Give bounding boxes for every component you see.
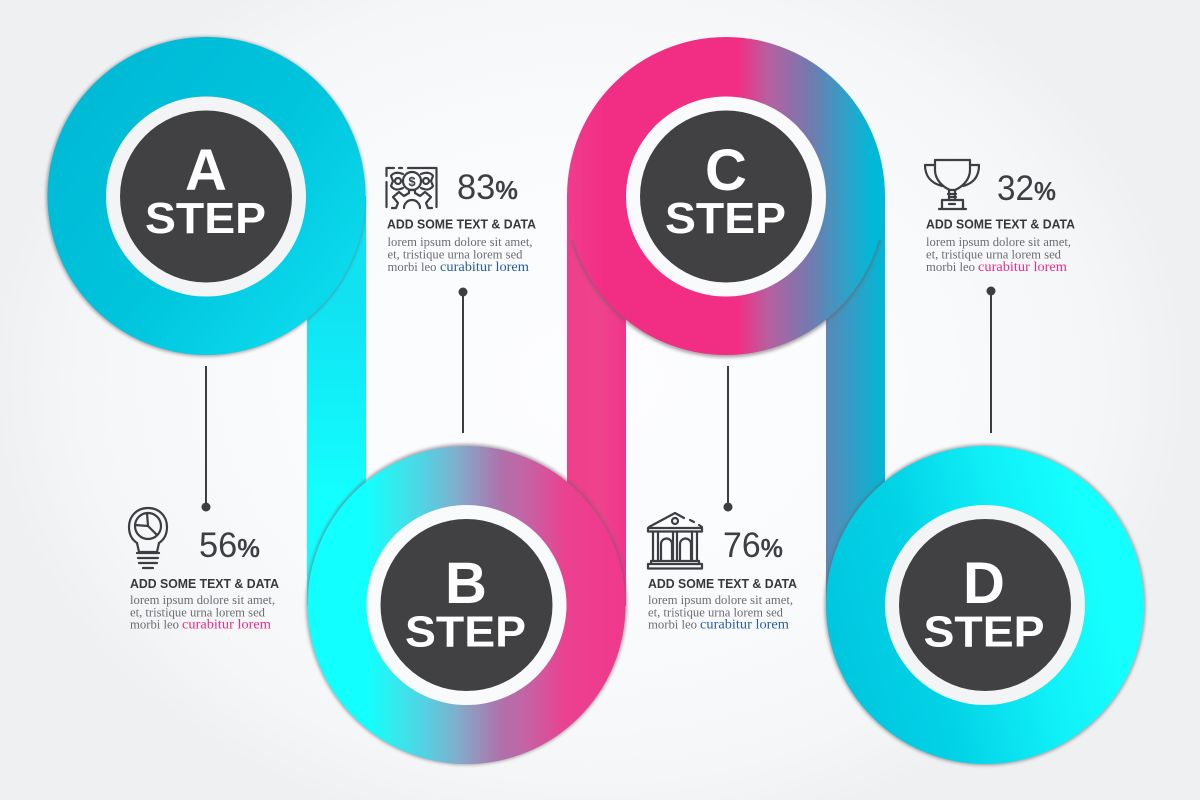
step D circle: STEP: [924, 608, 1044, 656]
leader line: C: [724, 366, 732, 512]
connector band: B to C: [567, 196, 626, 606]
body text: curabitur lorem: [700, 616, 789, 632]
step B circle: B: [445, 551, 487, 616]
info block: A 56%: [129, 508, 279, 632]
heading: ADD SOME TEXT & DATA: [926, 218, 1075, 232]
percentage: 32%: [997, 169, 1056, 208]
connector band: A to B: [307, 196, 366, 606]
step A circle: STEP: [145, 194, 266, 243]
info block: D 32%: [925, 160, 1075, 274]
icon: money and gear: $: [408, 174, 416, 189]
body text: morbi leo: [648, 618, 697, 632]
info block: C 76%: [648, 513, 797, 632]
step D circle: D: [963, 551, 1005, 616]
body text: curabitur lorem: [440, 259, 529, 274]
body text: lorem ipsum dolore sit amet,: [648, 593, 793, 607]
body text: morbi leo: [388, 260, 436, 274]
body text: lorem ipsum dolore sit amet,: [926, 235, 1071, 249]
leader line: A: [202, 366, 210, 512]
percentage: 56%: [199, 526, 260, 565]
body text: [926, 235, 1071, 274]
body text: et, tristique urna lorem sed: [130, 606, 266, 620]
step A circle: A: [185, 138, 227, 203]
body text: lorem ipsum dolore sit amet,: [388, 235, 532, 249]
body text: et, tristique urna lorem sed: [388, 248, 523, 262]
info block: B 83%: [386, 168, 536, 274]
icon: money and gear: [386, 168, 436, 208]
icon: trophy: [925, 160, 979, 209]
step C circle: [566, 36, 886, 358]
leader line: B: [458, 288, 468, 433]
body text: et, tristique urna lorem sed: [926, 248, 1062, 262]
step A circle: [46, 36, 366, 356]
heading: ADD SOME TEXT & DATA: [387, 218, 536, 232]
body text: curabitur lorem: [182, 616, 271, 632]
connector band: C to D: [826, 196, 885, 606]
body text: [388, 235, 532, 274]
step B circle: STEP: [405, 608, 526, 656]
body text: [648, 593, 793, 632]
body text: [130, 593, 275, 632]
body text: et, tristique urna lorem sed: [648, 606, 784, 620]
body text: morbi leo: [926, 260, 975, 274]
body text: lorem ipsum dolore sit amet,: [130, 593, 275, 607]
step C circle: STEP: [665, 194, 786, 243]
heading: ADD SOME TEXT & DATA: [648, 577, 797, 591]
heading: ADD SOME TEXT & DATA: [130, 577, 279, 591]
percentage: 76%: [723, 526, 783, 565]
body text: morbi leo: [130, 618, 179, 632]
step B circle: [306, 444, 627, 765]
leader line: D: [986, 286, 996, 433]
body text: curabitur lorem: [978, 259, 1067, 274]
percentage: 83%: [457, 168, 518, 207]
step D circle: [824, 444, 1146, 766]
icon: bank building: [648, 513, 702, 568]
icon: light bulb with pie chart: [129, 508, 167, 568]
step C circle: C: [705, 138, 747, 203]
